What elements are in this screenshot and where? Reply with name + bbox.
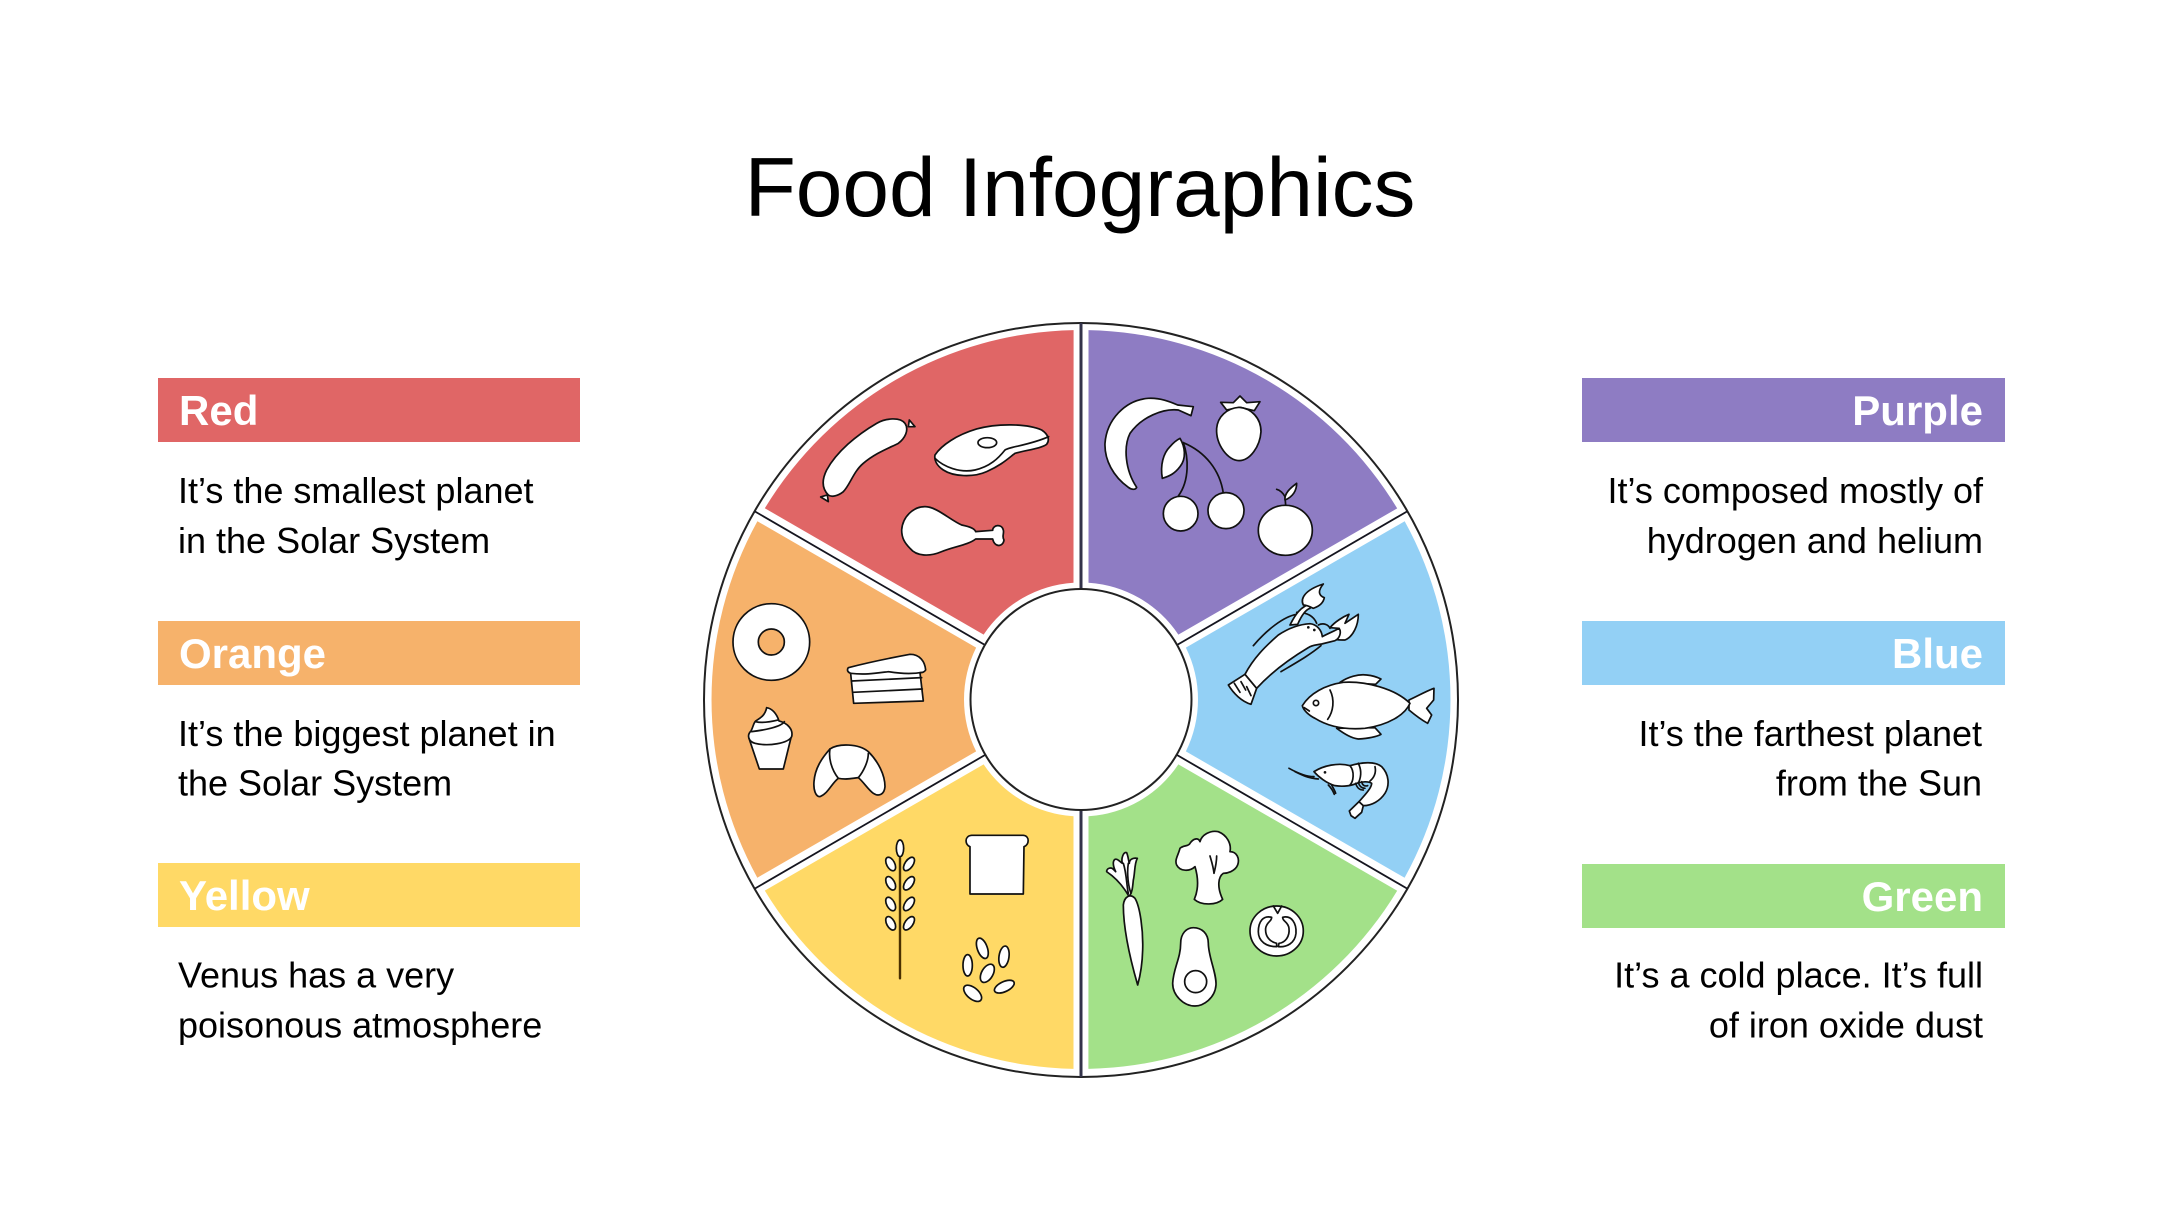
title: Food Infographics (745, 140, 1415, 234)
icon: apple (1258, 483, 1312, 555)
icon: fish (1302, 675, 1434, 739)
heading: blue: Blue (1892, 630, 1983, 677)
text block: blue: from the Sun (1776, 762, 1982, 804)
icon: broccoli (1176, 831, 1238, 904)
icon: lobster (1228, 584, 1358, 704)
icon: strawberry (1217, 396, 1261, 461)
icon: tomato (1250, 906, 1303, 956)
text block: purple: hydrogen and helium (1647, 520, 1983, 561)
segment: orange sweets (603, 458, 1021, 878)
icon: donut (733, 604, 810, 680)
icon: cupcake (749, 708, 792, 769)
spokes (755, 323, 1407, 1077)
icon: sausage (821, 419, 915, 502)
icon: steak (935, 425, 1049, 476)
text block: red: It’s the smallest planet (178, 470, 534, 511)
icon: cake (848, 654, 926, 703)
icon: shrimp (1289, 763, 1388, 818)
text block: yellow (178, 954, 542, 1046)
heading: orange: Orange (179, 630, 326, 677)
icon: seeds (961, 937, 1016, 1005)
segment: blue seafood (1141, 521, 1559, 941)
heading: purple: Purple (1852, 387, 1983, 434)
text block: purple (1608, 470, 1984, 561)
text block: blue (1638, 713, 1982, 804)
text block: red: in the Solar System (178, 520, 490, 561)
panel: yellow (158, 863, 580, 1046)
icon: bread (966, 835, 1028, 894)
panel: green (1582, 864, 2005, 1046)
text block: yellow: poisonous atmosphere (178, 1004, 542, 1046)
food wheel (603, 241, 1559, 1158)
panel: purple (1582, 378, 2005, 561)
text block: red (178, 470, 534, 561)
center circle (970, 589, 1192, 810)
segment: green vegetables (979, 738, 1397, 1158)
segment: purple fruit (1088, 330, 1397, 635)
icon: croissant (814, 745, 885, 797)
text block: orange (178, 713, 556, 804)
text block: orange: the Solar System (178, 762, 452, 804)
icon: wheat (884, 840, 917, 978)
outer ring (704, 323, 1458, 1077)
heading: yellow: Yellow (179, 872, 310, 919)
segment: red meat (765, 241, 1183, 661)
text block: green: of iron oxide dust (1709, 1004, 1983, 1046)
icon: carrot (1107, 853, 1143, 985)
icon: chicken leg (902, 507, 1004, 555)
icon: banana (1105, 398, 1193, 489)
text block: green: It’s a cold place. It’s full (1614, 954, 1983, 996)
text block: yellow: Venus has a very (178, 954, 454, 996)
text block: purple: It’s composed mostly of (1608, 470, 1984, 511)
heading: green: Green (1862, 873, 1983, 920)
icon: cherries (1162, 438, 1244, 531)
icon: avocado (1173, 928, 1216, 1006)
panel: blue (1582, 621, 2005, 804)
text block: orange: It’s the biggest planet in (178, 713, 556, 754)
panel: red (158, 378, 580, 561)
panel: orange (158, 621, 580, 804)
text block: blue: It’s the farthest planet (1638, 713, 1982, 754)
segment: yellow grains (765, 764, 1074, 1069)
text block: green (1614, 954, 1983, 1046)
heading: red: Red (179, 387, 258, 434)
